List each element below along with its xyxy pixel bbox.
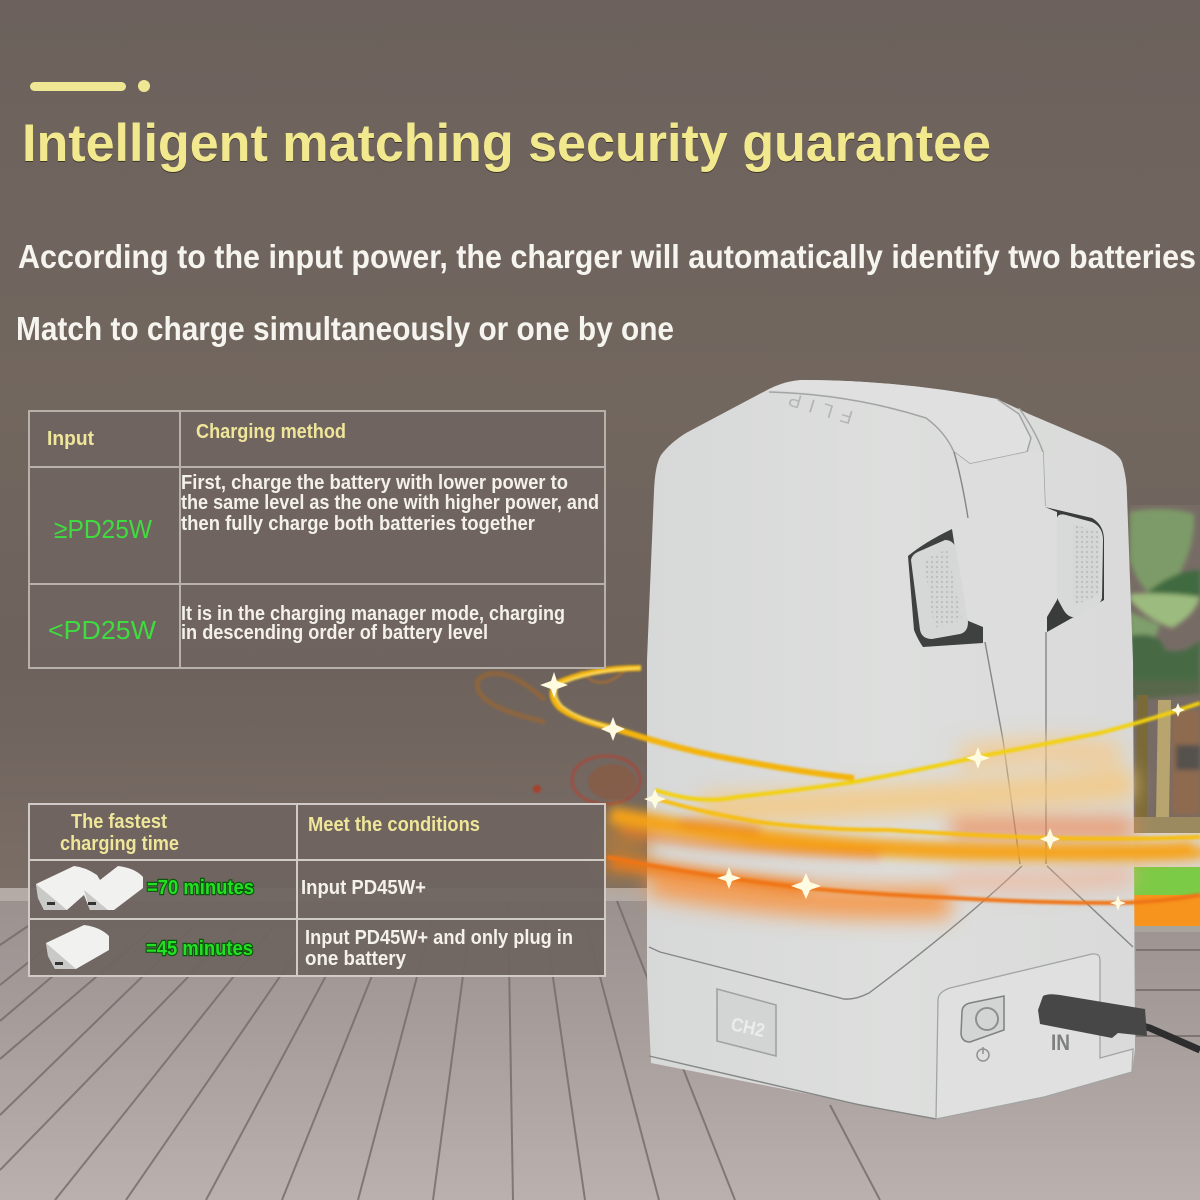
condition: one battery: one battery xyxy=(305,948,407,970)
row text: first method: First, charge the battery with lower power to xyxy=(181,472,568,494)
row text: second method xyxy=(181,603,565,644)
row text: second method: in descending order of battery level xyxy=(181,622,488,644)
latch left xyxy=(908,529,983,647)
panel seams xyxy=(769,392,1045,506)
input port panel: IN xyxy=(1051,1030,1070,1055)
condition: input PD45W+: Input PD45W+ xyxy=(301,877,426,899)
header: fastest charging time xyxy=(60,811,179,855)
top panel xyxy=(769,380,1031,464)
table header: input: Input xyxy=(47,428,94,450)
charger device: FLIP xyxy=(786,388,855,427)
header: fastest charging time: The fastest xyxy=(71,811,167,833)
background wall xyxy=(0,0,1200,890)
subtitle line 2: Match to charge simultaneously or one by one xyxy=(16,310,674,347)
sparkles xyxy=(540,672,1185,911)
table: charging time xyxy=(29,804,605,976)
title: Intelligent matching security guarantee xyxy=(22,114,991,173)
header: fastest charging time: charging time xyxy=(60,833,179,855)
background floor xyxy=(0,888,1200,1200)
row text: second method: It is in the charging manager mode, charging xyxy=(181,603,565,625)
decorative accent bar xyxy=(30,80,150,92)
row label: below PD25W: <PD25W xyxy=(48,615,156,645)
table: charging method xyxy=(29,411,605,668)
row text: first method xyxy=(181,472,599,535)
time: 70 minutes: =70 minutes xyxy=(147,877,254,899)
header: meet the conditions: Meet the conditions xyxy=(308,814,480,836)
body seams xyxy=(649,452,1133,1119)
gold ribbons xyxy=(553,668,1200,903)
input port panel xyxy=(936,954,1133,1119)
CH2 label xyxy=(717,989,776,1056)
usb cable xyxy=(1038,994,1200,1050)
charger body xyxy=(647,380,1135,1119)
time: 45 minutes: =45 minutes xyxy=(146,938,253,960)
row text: first method: then fully charge both batteries together xyxy=(181,513,535,535)
condition: one battery: Input PD45W+ and only plug in xyxy=(305,927,573,949)
background rings xyxy=(477,670,640,804)
CH2 label: CH2 xyxy=(729,1014,767,1042)
charger device xyxy=(647,380,1200,1119)
plant behind charger xyxy=(1130,505,1200,932)
row text: first method: the same level as the one with higher power, and xyxy=(181,492,599,514)
glow bands xyxy=(600,751,1134,903)
center spine xyxy=(953,452,1057,864)
charging light swirls xyxy=(477,668,1200,911)
icon: two batteries xyxy=(36,866,143,910)
latch right xyxy=(1045,507,1104,632)
table header: charging method: Charging method xyxy=(196,421,346,443)
icon: single battery xyxy=(46,925,109,969)
row label: at least PD25W: ≥PD25W xyxy=(54,514,152,544)
condition: one battery xyxy=(305,927,573,970)
